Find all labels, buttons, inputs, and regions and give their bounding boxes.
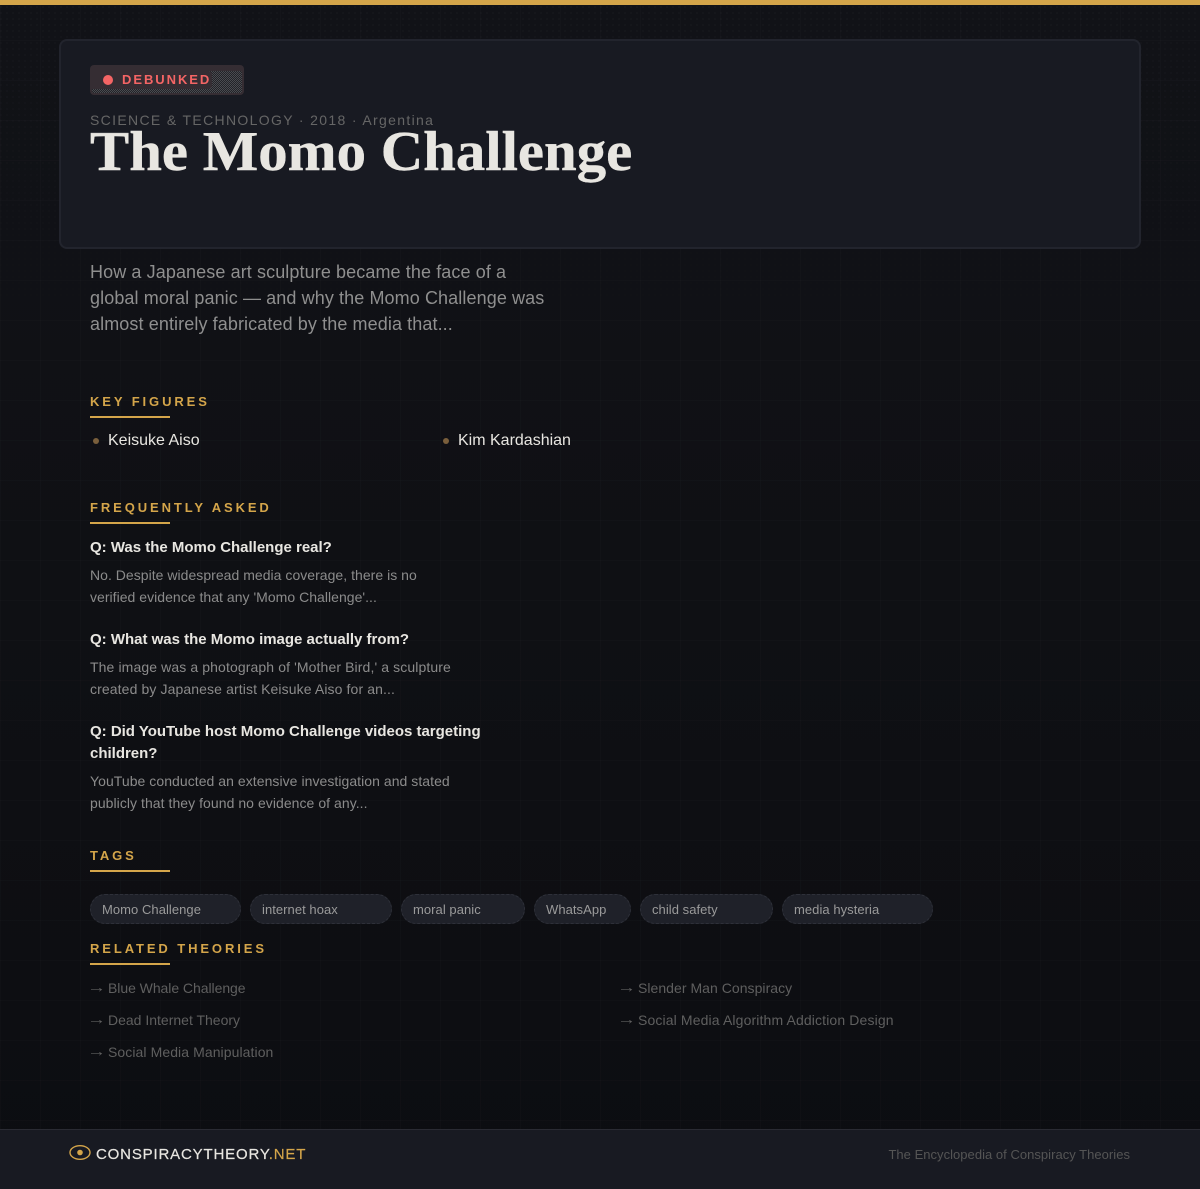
related link: Social Media Algorithm Addiction Design: [638, 1012, 894, 1028]
answer 2: The image was a photograph of 'Mother Bird,' a sculpture: [90, 659, 451, 675]
tag: [250, 894, 392, 924]
related link: →: [617, 979, 636, 995]
heading: related theories: RELATED THEORIES: [90, 941, 267, 956]
related link: Social Media Manipulation: [108, 1044, 273, 1060]
related link: Blue Whale Challenge: [108, 980, 246, 996]
title: The Momo Challenge: [90, 121, 632, 183]
footer logo text: CONSPIRACYTHEORY.NET: [96, 1146, 306, 1163]
answer 1: verified evidence that any 'Momo Challenge'...: [90, 589, 377, 605]
intro text: global moral panic — and why the Momo Challenge was: [90, 288, 544, 308]
badge: debunked: [90, 65, 244, 95]
tag: Momo Challenge: [102, 902, 201, 917]
related link: Slender Man Conspiracy: [638, 980, 792, 996]
heading: frequently asked: FREQUENTLY ASKED: [90, 500, 272, 515]
question 3: children?: [90, 745, 157, 762]
tag: media hysteria: [794, 902, 879, 917]
key figure: Keisuke Aiso: Keisuke Aiso: [108, 432, 200, 449]
tag: moral panic: [413, 902, 481, 917]
badge texture: [92, 71, 242, 93]
heading: tags: TAGS: [90, 848, 137, 863]
badge dot: [103, 75, 113, 85]
tag: [640, 894, 773, 924]
answer 3: publicly that they found no evidence of any...: [90, 795, 368, 811]
badge label backing: [92, 71, 212, 89]
answer 2: [90, 659, 451, 697]
heading: key figures: KEY FIGURES: [90, 394, 210, 409]
key figure: Kim Kardashian: Kim Kardashian: [458, 432, 571, 449]
related link: →: [87, 1011, 106, 1027]
tag: [401, 894, 525, 924]
answer 1: No. Despite widespread media coverage, there is no: [90, 567, 417, 583]
icon: eye logo: [69, 1145, 91, 1160]
tag: WhatsApp: [546, 902, 606, 917]
intro text: How a Japanese art sculpture became the face of a: [90, 262, 506, 282]
tag: internet hoax: [262, 902, 338, 917]
question 1: Q: Was the Momo Challenge real?: [90, 539, 332, 556]
tag: [782, 894, 933, 924]
tag: child safety: [652, 902, 718, 917]
related link: →: [617, 1011, 636, 1027]
related link: Dead Internet Theory: [108, 1012, 240, 1028]
related link: →: [87, 1043, 106, 1059]
question 3: Q: Did YouTube host Momo Challenge videos targeting: [90, 723, 481, 740]
answer 3: YouTube conducted an extensive investigation and stated: [90, 773, 450, 789]
answer 3: [90, 773, 450, 811]
question 3: [90, 723, 481, 762]
intro text: almost entirely fabricated by the media that...: [90, 314, 453, 334]
answer 1: [90, 567, 417, 605]
intro text: [90, 262, 544, 334]
tag: [90, 894, 241, 924]
answer 2: created by Japanese artist Keisuke Aiso for an...: [90, 681, 395, 697]
category meta line: SCIENCE & TECHNOLOGY · 2018 · Argentina: [90, 112, 434, 128]
footer: [0, 1129, 1200, 1189]
top accent bar: [0, 0, 1200, 5]
footer tagline: The Encyclopedia of Conspiracy Theories: [888, 1147, 1130, 1162]
background dots: [0, 0, 1200, 400]
related link: →: [87, 979, 106, 995]
badge label: DEBUNKED: [122, 72, 211, 87]
panel: header: [59, 39, 1141, 249]
question 2: Q: What was the Momo image actually from?: [90, 631, 409, 648]
tag: [534, 894, 631, 924]
